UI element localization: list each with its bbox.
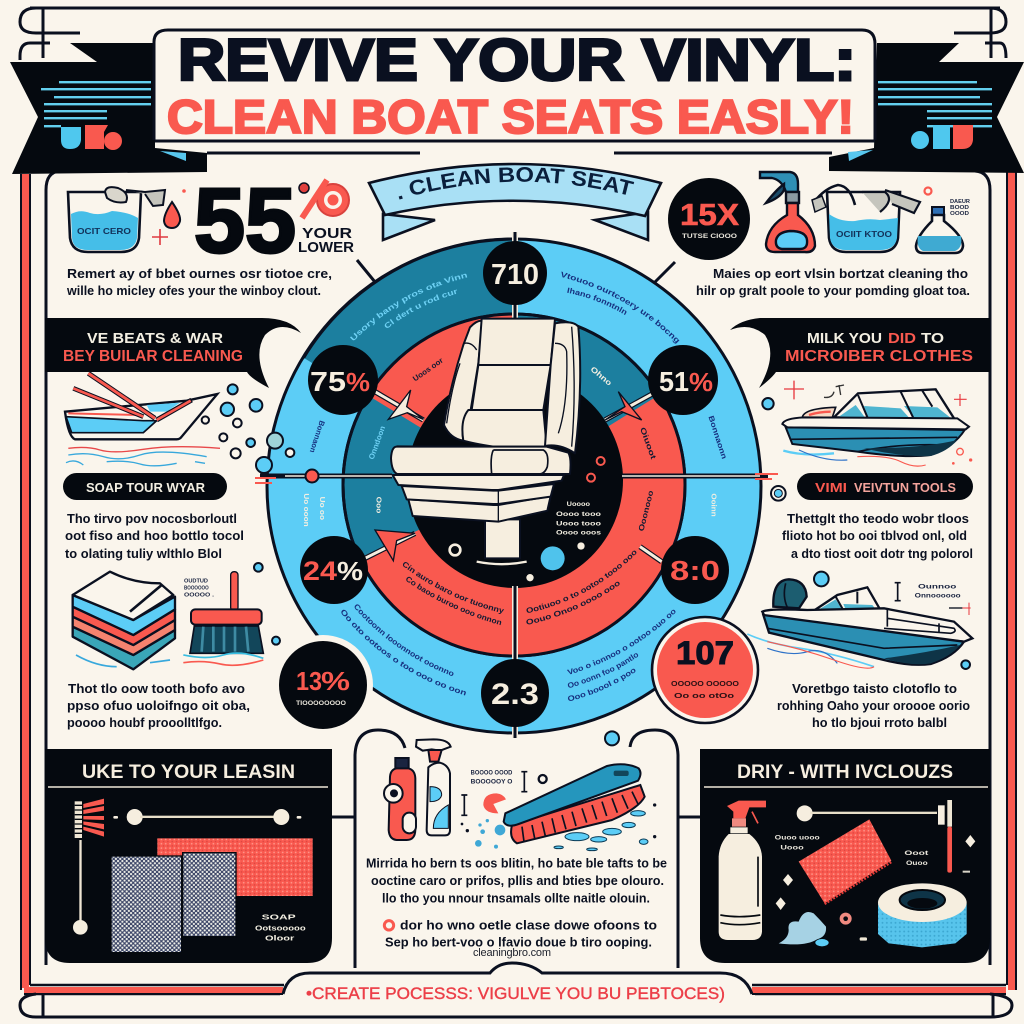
pill: vinyl vacuum tools bbox=[797, 473, 973, 500]
illustration: cabin boat bbox=[762, 381, 972, 501]
ring labels and arrows, drawn at 3x bbox=[223, 241, 770, 744]
curved ring microtext bbox=[223, 241, 770, 744]
sparkles and captions bbox=[775, 834, 975, 941]
icon: brush with slider bbox=[73, 799, 301, 935]
curved ring microtext: Oo oonn foo pantlo bbox=[568, 653, 638, 688]
panel: bottom right tools bbox=[700, 749, 990, 963]
curved ring microtext: Ooonooo bbox=[637, 489, 655, 532]
text block: top left: wille ho micley ofes your the winboy clout. bbox=[66, 283, 321, 298]
text block: ooctine caro or prifos, pllis and bties bpe olouro. bbox=[371, 873, 664, 888]
icon: beaker with water: OCIT CERO bbox=[77, 226, 131, 236]
badge: 13%: 13 bbox=[296, 666, 322, 696]
badge: 51% bbox=[648, 345, 718, 415]
footer tab bbox=[280, 963, 755, 1017]
badge: 51%: 51 bbox=[659, 366, 689, 397]
mini label: BOOOO OOOD bbox=[471, 771, 513, 777]
text block: poooo houbf prooolltlfgo. bbox=[67, 715, 222, 730]
icon: spray bottle bbox=[760, 172, 815, 252]
right title ribbon bbox=[829, 43, 1024, 173]
text block: a dto tiost ooit dotr tng polorol bbox=[791, 546, 973, 561]
hub microtext: Uooo tooo bbox=[556, 520, 601, 527]
text block bbox=[782, 511, 973, 561]
icon: right beaker: OCIIT KTOO bbox=[836, 229, 892, 239]
swatch caption bbox=[255, 914, 306, 943]
outer ring bbox=[267, 239, 761, 733]
badge: 107: 107 bbox=[676, 635, 734, 671]
curved ring microtext: Ootiuoo o to ootoo tooo ooo bbox=[526, 550, 636, 613]
panel: bottom left tools bbox=[45, 749, 332, 963]
pill: vinyl vacuum tools: VIMI bbox=[815, 480, 847, 495]
badge: 8:0: 8:0 bbox=[670, 555, 720, 586]
badge: 107 bbox=[652, 617, 758, 723]
pill: soap your wear bbox=[63, 473, 227, 500]
badge: 13%: % bbox=[321, 666, 350, 696]
left heading band bbox=[45, 318, 301, 388]
title line 2: CLEAN BOAT SEATS EASLY! bbox=[167, 90, 854, 143]
stat: 55%: YOUR bbox=[302, 225, 352, 242]
illustration: towel stack bbox=[73, 572, 175, 669]
badge: 13% bbox=[273, 635, 373, 735]
text block: Sep ho bert-voo o lfavio doue b tiro ooping. bbox=[385, 935, 652, 950]
text block: ho tlo bjoui rroto balbl bbox=[812, 715, 947, 730]
icon: right beaker bbox=[812, 185, 920, 252]
hub microtext: Uoooo bbox=[567, 501, 590, 508]
icon: cleaner spray bbox=[416, 739, 451, 835]
badge: 710: 710 bbox=[491, 259, 539, 291]
right heading band: MICROIBER CLOTHES bbox=[785, 348, 973, 365]
badge: 75%: % bbox=[346, 367, 370, 397]
swatch caption: Oloor bbox=[265, 936, 295, 943]
text block: top right: hilr op gralt poole to your pomding gloat toa. bbox=[696, 283, 970, 298]
mini label: BOOOOOY O bbox=[471, 779, 513, 785]
curved ring microtext: Voo o ionnoo o ootoo ouo oo bbox=[567, 610, 676, 674]
icon: coral cloth bbox=[799, 819, 892, 904]
text block bbox=[65, 511, 244, 561]
curved ring microtext: Cootoonn Iooonnoot ooonnoo bbox=[354, 604, 454, 676]
sparkles and captions: Ouoo uooo bbox=[775, 834, 820, 841]
curved ring microtext: Co baoo buroo ooo onnon bbox=[406, 576, 502, 626]
badge: 51%: % bbox=[689, 367, 713, 397]
badge: 15X: TUTSE CIOOO bbox=[682, 233, 737, 240]
sparkles and captions: Ouoo bbox=[906, 860, 928, 867]
badge: 710 bbox=[483, 241, 547, 305]
text block: Tho tirvo pov nocosborloutl bbox=[67, 511, 237, 526]
curved ring microtext: Uo oo bbox=[318, 497, 327, 520]
arrows bbox=[365, 390, 662, 562]
right heading band: DID bbox=[888, 330, 916, 347]
icon: white spray bottle bbox=[719, 801, 766, 940]
text block: top right: Maies op eort vlsin bortzat cleaning tho bbox=[713, 266, 968, 281]
sparkles and captions: Ooot bbox=[904, 850, 930, 857]
text block: rohhing Oaho your oroooe oorio bbox=[777, 698, 970, 713]
icon: flask: BOOD bbox=[950, 205, 969, 211]
text block: flioto hot bo ooi tblvod onl, old bbox=[782, 528, 967, 543]
curved ring microtext: Oiuoot bbox=[638, 426, 658, 461]
illustration: scrub brush: BOOOOOO bbox=[184, 585, 209, 591]
panel heading: UKE TO YOUR LEASIN bbox=[82, 762, 295, 783]
swatches bbox=[111, 838, 313, 953]
text block: Mirrida ho bern ts oos blitin, ho bate ble tafts to be bbox=[366, 856, 667, 871]
illustration: motor boat: Onnoooooo bbox=[915, 593, 961, 599]
badge: 15X: 15X bbox=[680, 197, 739, 232]
text block: Voretbgo taisto clotoflo to bbox=[792, 681, 957, 696]
stat: 55%: 55 bbox=[194, 170, 296, 272]
swatch caption: SOAP bbox=[262, 914, 296, 921]
circular diagram bbox=[255, 232, 778, 738]
hub dots bbox=[450, 457, 605, 581]
panel: left column bbox=[45, 318, 301, 730]
text block bbox=[366, 856, 667, 950]
text block: ppso ofuo uoloifngo oit oba, bbox=[67, 698, 250, 713]
text block: top left bbox=[66, 266, 332, 298]
badge: 8:0 bbox=[661, 536, 729, 604]
illustration: scrub brush bbox=[504, 731, 656, 851]
watermark: cleaningbro.com bbox=[473, 947, 551, 959]
hub microtext: Oooo ooos bbox=[556, 530, 601, 537]
curved ring microtext: Onndoon bbox=[367, 424, 387, 461]
icon: foam bbox=[779, 912, 826, 944]
curved ring microtext: Bonnaon bbox=[308, 419, 327, 454]
curved ring microtext: Vtouoo ourtcoery ure bocng bbox=[561, 272, 680, 344]
bubbles bbox=[202, 384, 294, 645]
badge: 15X bbox=[668, 178, 750, 260]
curved ring microtext: Ohno bbox=[589, 365, 614, 388]
illustration: motor boat: Ounnoo bbox=[918, 585, 957, 591]
badge: 24%: 24 bbox=[303, 556, 337, 586]
badge: 107: Oo oo otOo bbox=[674, 693, 734, 700]
badge: 24%: % bbox=[337, 556, 363, 586]
pill: soap your wear: SOAP TOUR WYAR bbox=[86, 480, 206, 495]
text block bbox=[777, 681, 970, 730]
icon: coral bottle bbox=[384, 758, 416, 840]
text block: dor ho wno oetle clase dowe ofoons to bbox=[400, 918, 657, 933]
illustration: scrub brush bbox=[76, 572, 263, 667]
hub microtext bbox=[556, 501, 601, 537]
connectors and center frame bbox=[332, 730, 700, 968]
footer caption: •CREATE POCESSS: VIGULVE YOU BU PEBTOCES) bbox=[306, 984, 725, 1003]
illustration: scrub brush: OOOOO . bbox=[184, 593, 215, 599]
curved ring microtext: Uoos oor bbox=[411, 356, 445, 383]
left heading band: VE BEATS & WAR bbox=[87, 330, 223, 347]
ribbon heading: clean boat seat: . CLEAN BOAT SEAT bbox=[398, 167, 634, 200]
badge: 75%: 75 bbox=[310, 366, 346, 397]
curved ring microtext: Ooo boool o poo bbox=[568, 668, 636, 701]
illustration: motor boat bbox=[747, 572, 972, 669]
curved ring microtext: Usory bany pros ota Vinno bbox=[350, 274, 468, 340]
sparkles and captions: Uooo bbox=[780, 844, 804, 851]
text block: oot fiso and hoo bottlo tocol bbox=[65, 528, 244, 543]
curved ring microtext: Ihano fonntnln bbox=[567, 288, 626, 315]
badge: 13%: TIOOOOOOOO bbox=[296, 700, 346, 707]
illustration: scrub brush: OUDTUD bbox=[184, 579, 208, 585]
panel heading: DRIY - WITH IVCLOUZS bbox=[737, 762, 953, 783]
pill: vinyl vacuum tools: VEIVTUN TOOLS bbox=[854, 480, 956, 495]
left heading band: BEY BUILAR CLEANING bbox=[63, 348, 243, 365]
curved ring microtext: Bonnaonn bbox=[706, 415, 729, 460]
badge: 2.3 bbox=[481, 659, 549, 727]
right heading band: TO bbox=[921, 330, 944, 347]
badge: 75% bbox=[308, 345, 378, 415]
illustration: boat seat bbox=[391, 319, 580, 564]
curved ring microtext: Cl dert u rod curl bbox=[384, 290, 457, 328]
title box bbox=[154, 28, 875, 153]
curved ring microtext: Oouo Onoo oooo ooo bbox=[526, 582, 620, 624]
icon: flask: DAEUR bbox=[950, 199, 970, 205]
icon: tape roll bbox=[878, 883, 967, 947]
text block: Thettglt tho teodo wobr tloos bbox=[787, 511, 969, 526]
curved ring microtext: Uo ooon bbox=[302, 493, 311, 527]
badge: 107: OOOOO OOOOO bbox=[671, 681, 740, 688]
text block: to olating tuliy wlthlo Blol bbox=[65, 546, 222, 561]
panel: right column bbox=[730, 318, 990, 730]
text block: Thot tlo oow tooth bofo avo bbox=[68, 681, 245, 696]
title line 1: REVIVE YOUR VINYL: bbox=[178, 28, 856, 93]
badge: 2.3: 2.3 bbox=[491, 678, 539, 711]
text block: top left: Remert ay of bbet ournes osr tiotoe cre, bbox=[67, 266, 332, 281]
badge: 24% bbox=[300, 536, 368, 604]
icon: beaker with water bbox=[68, 187, 186, 252]
ribbon heading: clean boat seat bbox=[367, 162, 663, 242]
text block: top right bbox=[696, 266, 970, 298]
inner ring bbox=[343, 314, 685, 656]
marker and swirl bbox=[461, 793, 506, 849]
icon: slider and marker bbox=[797, 800, 952, 873]
illustration: boat with paddles bbox=[65, 373, 220, 466]
icon: flask: OOOD bbox=[950, 211, 969, 217]
right heading band: MILK YOU bbox=[807, 330, 882, 347]
curved ring microtext: Cin auro baro oor tuoonny bbox=[402, 562, 504, 614]
swatch caption: Ootsooooo bbox=[255, 926, 306, 933]
text block: llo tho you nnour tnsamals ollte naitle olouin. bbox=[382, 890, 650, 905]
hub microtext: Oooo tooo bbox=[556, 511, 601, 518]
right heading band bbox=[730, 318, 990, 388]
left title ribbon bbox=[10, 43, 207, 174]
curved ring microtext: Ooo bbox=[375, 497, 384, 514]
inner black hub bbox=[407, 372, 623, 588]
stat: 55% bbox=[194, 170, 354, 272]
curved ring microtext: Ooinn bbox=[710, 493, 719, 517]
divider axes bbox=[255, 232, 778, 738]
text block bbox=[67, 681, 250, 730]
icon: flask bbox=[916, 188, 970, 253]
stat: 55%: LOWER bbox=[298, 239, 354, 256]
curved ring microtext: Oo oto ootoos o too ooo oo oon bbox=[341, 610, 466, 696]
mini label bbox=[471, 771, 513, 785]
panel: center bottom tools bbox=[366, 731, 667, 959]
